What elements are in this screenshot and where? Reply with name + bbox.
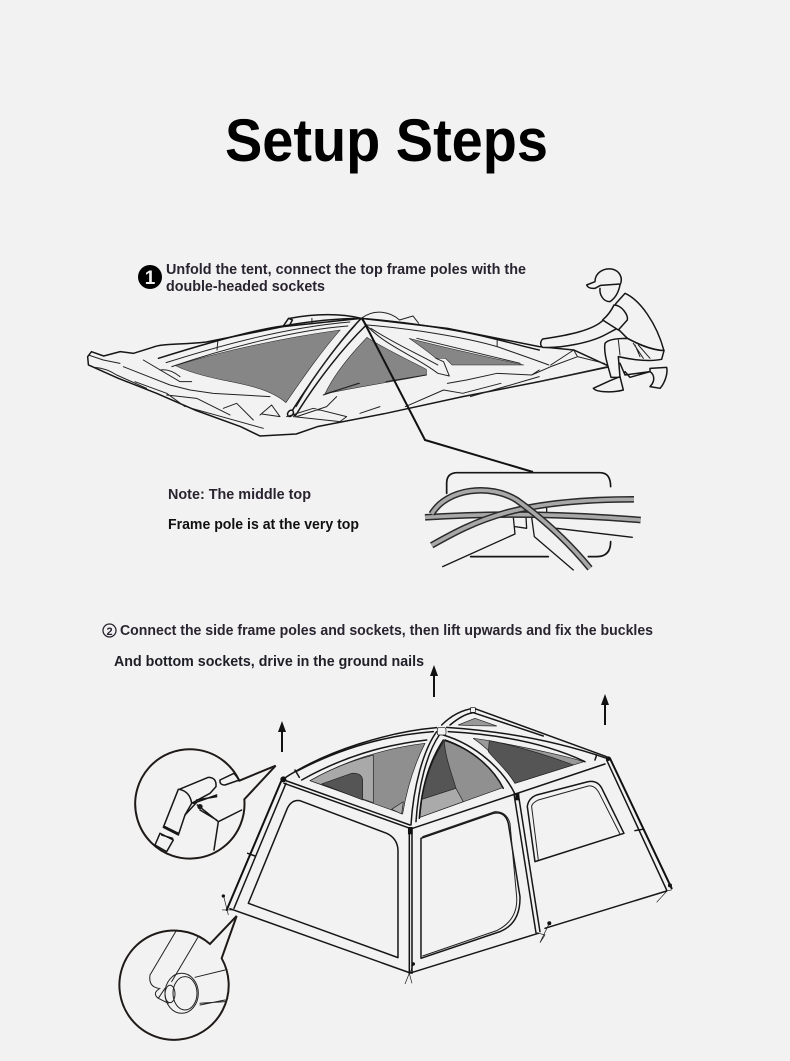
bracket frame [447,473,611,557]
step 1 heading [138,262,526,295]
note text [168,487,359,533]
roof frame poles [158,312,549,367]
person: torso [607,293,664,351]
centre arch pole [286,318,449,417]
pole: flat [425,515,641,520]
title: Setup Steps [225,107,548,174]
roof arcs [283,708,607,825]
icon: number 1 badge: 1 [145,268,156,289]
side window left [248,800,398,958]
roof panels grey [310,718,584,817]
step 1 text [166,262,526,295]
leader line to detail [362,318,533,472]
note text: Frame pole is at the very top [168,517,359,533]
person: sleeve [603,305,627,330]
arrow centre [430,665,438,697]
person: shorts and front leg [605,338,664,377]
left corner pole [227,782,286,910]
door panel centre [421,812,520,958]
person: shoe [593,377,623,392]
pole: arched top [432,490,590,568]
step 2 text: Connect the side frame poles and sockets, then lift upwards and fix the buckles [120,623,653,639]
fabric folds right [325,350,610,407]
inset: top joint [135,749,276,859]
middle right pole [514,794,540,933]
tent lines [443,505,632,570]
arrow right [601,694,609,725]
step 1 text: Unfold the tent, connect the top frame poles with the [166,262,526,278]
right corner pole [607,758,672,890]
arrow left [278,721,286,752]
side window right [527,781,624,862]
detail: crossing frame poles [425,473,641,570]
inset callouts [119,749,276,1040]
person: back leg and foot [620,363,667,388]
icon: number 1 badge [138,265,162,289]
illustration: unfolded tent on ground [88,312,610,436]
grey mesh panels [176,330,524,403]
note text: Note: The middle top [168,487,311,503]
step 2 heading [103,623,653,670]
icon: number 2: 2 [106,626,113,638]
pole: rising [432,499,634,545]
icon: number 2 [103,624,116,638]
person: head and cap [587,269,621,302]
illustration: assembled tent [222,708,672,984]
tent fabric outline [88,318,610,436]
person: arm and hand [541,320,617,347]
inset: bottom socket [119,916,237,1040]
walls and base lines [230,891,667,973]
step 2 text [114,623,653,670]
centre corner pole [409,828,412,973]
step 2 text: And bottom sockets, drive in the ground nails [114,654,424,670]
step 1 text: double-headed sockets [166,279,325,295]
arrows: lift upward [278,665,609,752]
eave lines [284,764,605,828]
fabric folds left [88,355,380,428]
person crouching [541,269,667,392]
joints and ground nails [222,708,672,984]
